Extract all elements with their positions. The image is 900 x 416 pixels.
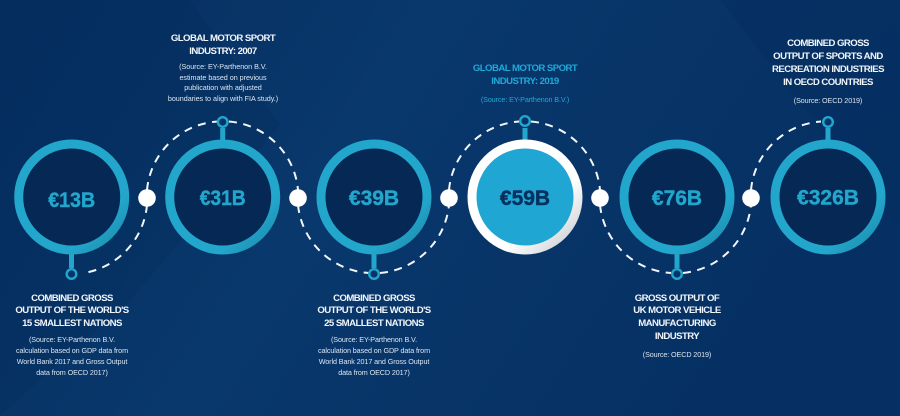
label: combined gross output 15 smallest nations: (Source: EY-Parthenon B.V. [29,335,115,344]
label: UK motor vehicle manufacturing [633,292,721,359]
circle: €13B: €13B [48,189,95,212]
label: UK motor vehicle manufacturing: MANUFACTURING [638,318,716,329]
label: global motor sport industry 2007: publication with adjusted [184,83,262,92]
label: global motor sport industry 2007: boundaries to align with FIA study.) [168,94,278,103]
label: sports and recreation industries OECD: (Source: OECD 2019) [794,96,862,105]
label: combined gross output 25 smallest nations: COMBINED GROSS [333,292,415,304]
label: global motor sport industry 2019 [473,63,578,104]
label: global motor sport industry 2019: GLOBAL MOTOR SPORT [473,63,577,74]
circle: €59B highlighted: €59B [500,187,550,210]
label: combined gross output 15 smallest nations: calculation based on GDP data from [16,346,128,355]
label: combined gross output 25 smallest nations: (Source: EY-Parthenon B.V. [331,335,417,344]
label: global motor sport industry 2019: (Source: EY-Parthenon B.V.) [481,95,569,104]
label: UK motor vehicle manufacturing: GROSS OUTPUT OF [635,292,719,304]
connector dots [138,189,760,207]
circle: €31B: €31B [200,187,246,210]
label: sports and recreation industries OECD [772,38,884,105]
label: UK motor vehicle manufacturing: UK MOTOR VEHICLE [633,305,721,316]
label: combined gross output 25 smallest nations: OUTPUT OF THE WORLD'S [317,305,431,316]
circle: €13B [19,144,125,279]
label: sports and recreation industries OECD: RECREATION INDUSTRIES [772,64,884,75]
circle: €59B highlighted [472,116,578,250]
dashed connectors [84,122,821,273]
label: combined gross output 15 smallest nations: COMBINED GROSS [31,292,113,304]
label: global motor sport industry 2007: INDUSTRY: 2007 [189,46,257,57]
label: combined gross output 25 smallest nations [317,292,431,377]
label: combined gross output 15 smallest nations: 15 SMALLEST NATIONS [22,318,122,329]
label: global motor sport industry 2007 [168,33,278,103]
label: global motor sport industry 2007: (Source: EY-Parthenon B.V. [179,62,267,71]
label: sports and recreation industries OECD: IN OECD COUNTRIES [783,77,873,88]
label: UK motor vehicle manufacturing: INDUSTRY [655,331,699,342]
label: combined gross output 15 smallest nations: OUTPUT OF THE WORLD'S [15,305,129,316]
label: combined gross output 25 smallest nations: data from OECD 2017) [338,368,410,377]
label: combined gross output 15 smallest nations: data from OECD 2017) [36,368,108,377]
label: UK motor vehicle manufacturing: (Source: OECD 2019) [643,350,711,359]
circle: €326B: €326B [797,186,859,210]
label: global motor sport industry 2019: INDUSTRY: 2019 [491,76,559,87]
circle: €39B [321,144,427,279]
label: combined gross output 25 smallest nations: 25 SMALLEST NATIONS [324,318,424,329]
label: combined gross output 25 smallest nations: World Bank 2017 and Gross Output [319,357,429,366]
label: combined gross output 15 smallest nations [15,292,129,377]
label: global motor sport industry 2007: GLOBAL MOTOR SPORT [171,33,275,44]
circle: €326B [775,117,881,250]
circle: €39B: €39B [349,187,399,210]
label: sports and recreation industries OECD: OUTPUT OF SPORTS AND [773,51,883,62]
label: global motor sport industry 2007: estimate based on previous [179,73,267,82]
label: sports and recreation industries OECD: COMBINED GROSS [787,38,869,49]
circle: €76B [624,144,730,279]
circle: €76B: €76B [652,187,702,210]
label: combined gross output 25 smallest nations: calculation based on GDP data from [318,346,430,355]
circle: €31B [170,117,276,250]
label: combined gross output 15 smallest nations: World Bank 2017 and Gross Output [17,357,127,366]
